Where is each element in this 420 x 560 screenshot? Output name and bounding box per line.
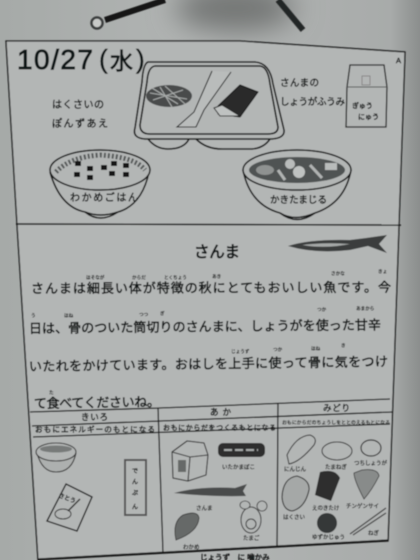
furigana line 1: きょ [378, 268, 387, 274]
icon: wakame [175, 513, 199, 540]
menu illustration: tray [134, 62, 284, 149]
title: date: ( [99, 44, 108, 74]
furigana line 1: さかな [331, 270, 345, 277]
label: sanma no shoga-fumi [280, 78, 345, 108]
label: bok choy: チンゲンサイ [346, 502, 379, 510]
furigana line 2: ぎ [160, 310, 165, 316]
label: enoki: えのきたけ [312, 505, 340, 512]
icon: green onion [350, 508, 386, 535]
furigana line 2: つつ [139, 312, 149, 317]
label: yuzu: ゆずかじゅう [312, 533, 345, 541]
label: kamaboko: いたかまぼこ [222, 464, 255, 471]
icon: starch packet: で [132, 468, 138, 475]
icon: milk carton: ぎゅう [352, 101, 373, 110]
label: wakame: わかめ [183, 544, 200, 551]
label: hakusai no ponzu-ae: はくさいの [52, 99, 104, 111]
icon: saury [174, 484, 247, 496]
column head: yellow: きいろ [81, 412, 108, 422]
label: saury: さんま [196, 505, 213, 512]
label: egg: たまご [243, 534, 260, 542]
furigana line 1: とくちょう [164, 275, 187, 281]
icon: milk carton: にゅう [358, 113, 379, 121]
food group table [30, 399, 392, 559]
furigana line 2: あまから [356, 305, 374, 312]
icon: milk carton small [172, 441, 208, 481]
icon: starch packet: ん [132, 504, 138, 511]
article text [29, 268, 391, 411]
line 1: さんまは細長い体が特徴の秋にとてもおいしい魚です。今 [31, 280, 391, 296]
label: napa cabbage: はくさい [283, 514, 306, 521]
furigana line 2: つか [317, 306, 327, 313]
title: date: 10/27 [17, 44, 93, 75]
label: onion: たまねぎ [325, 463, 347, 471]
icon: starch packet: ん [132, 479, 138, 486]
icon: enoki mushrooms [315, 471, 340, 501]
title: date [17, 44, 145, 75]
label: sanma no shoga-fumi: さんまの [280, 78, 319, 89]
label: carrot: にんじん [284, 466, 307, 473]
furigana line 3: き [341, 342, 346, 348]
icon: eggs [240, 501, 267, 533]
furigana line 1: からだ [132, 274, 146, 281]
icon: onion [322, 442, 352, 460]
label: A: A [396, 56, 401, 65]
label: ginger: つちしょうが [354, 459, 388, 467]
yellow caption: おもにエネルギーのもとになる [35, 425, 155, 434]
column head: red: あか [210, 407, 231, 417]
line 2: 日は、骨のついた筒切りのさんまに、しょうがを使った甘辛 [29, 317, 381, 336]
icon: kakitama soup bowl [243, 150, 351, 220]
icon: saury fish [288, 235, 387, 253]
hanging string and hole, left [92, 0, 165, 28]
furigana line 3: じょうず [231, 348, 250, 355]
furigana line 2: ほね [64, 313, 74, 319]
hanging string and hole, right [278, 0, 303, 30]
label: hakusai no ponzu-ae: ぽんずあえ [52, 118, 108, 130]
icon: kakitama soup bowl: かきたまじる [270, 195, 327, 206]
heading: sanma: さんま [194, 243, 240, 261]
furigana line 2 [31, 305, 374, 319]
furigana line 1: あき [212, 273, 221, 280]
icon: sugar bag: さとう [57, 492, 77, 505]
icon: bok choy [354, 470, 379, 499]
icon: milk carton [346, 65, 387, 127]
title: date: 水 [110, 48, 133, 74]
red foods [172, 441, 267, 551]
icon: starch packet [125, 460, 146, 515]
icon: wakame rice bowl [50, 150, 150, 218]
line 3: いたれをかけています。おはしを上手に使って骨に気をつけ [29, 354, 388, 374]
furigana line 3: つか [273, 346, 283, 353]
furigana line 1: ほそなが [86, 274, 105, 281]
column head: green: みどり [323, 403, 350, 413]
icon: wakame rice bowl: わかめごはん [70, 191, 138, 204]
icon: napa cabbage [282, 476, 309, 511]
yellow foods [36, 443, 146, 531]
furigana line 1 [86, 268, 387, 281]
icon: rice bowl [36, 443, 76, 472]
furigana line 2: う [31, 313, 36, 319]
icon: kamaboko [218, 443, 265, 457]
furigana line 3 [231, 342, 346, 355]
green foods [282, 435, 388, 541]
divider [16, 224, 401, 225]
icon: starch packet: ぷ [132, 490, 138, 497]
red caption: おもにからだをつくるもとになる [163, 424, 276, 432]
green caption: おもにからだのちょうしをととのえるもとになる [282, 419, 390, 426]
label: green onion: ねぎ [368, 529, 380, 537]
icon: carrot [287, 435, 315, 464]
line 4: て食べてくださいね。 [34, 394, 160, 411]
label: sanma no shoga-fumi: しょうがふうみ [280, 96, 345, 108]
furigana line 4: た [49, 390, 54, 396]
furigana line 3: ほね [311, 346, 321, 352]
icon: yuzu [317, 513, 337, 533]
label: hakusai no ponzu-ae [52, 99, 108, 130]
icon: ginger [361, 440, 381, 456]
title: date: ) [136, 44, 145, 74]
